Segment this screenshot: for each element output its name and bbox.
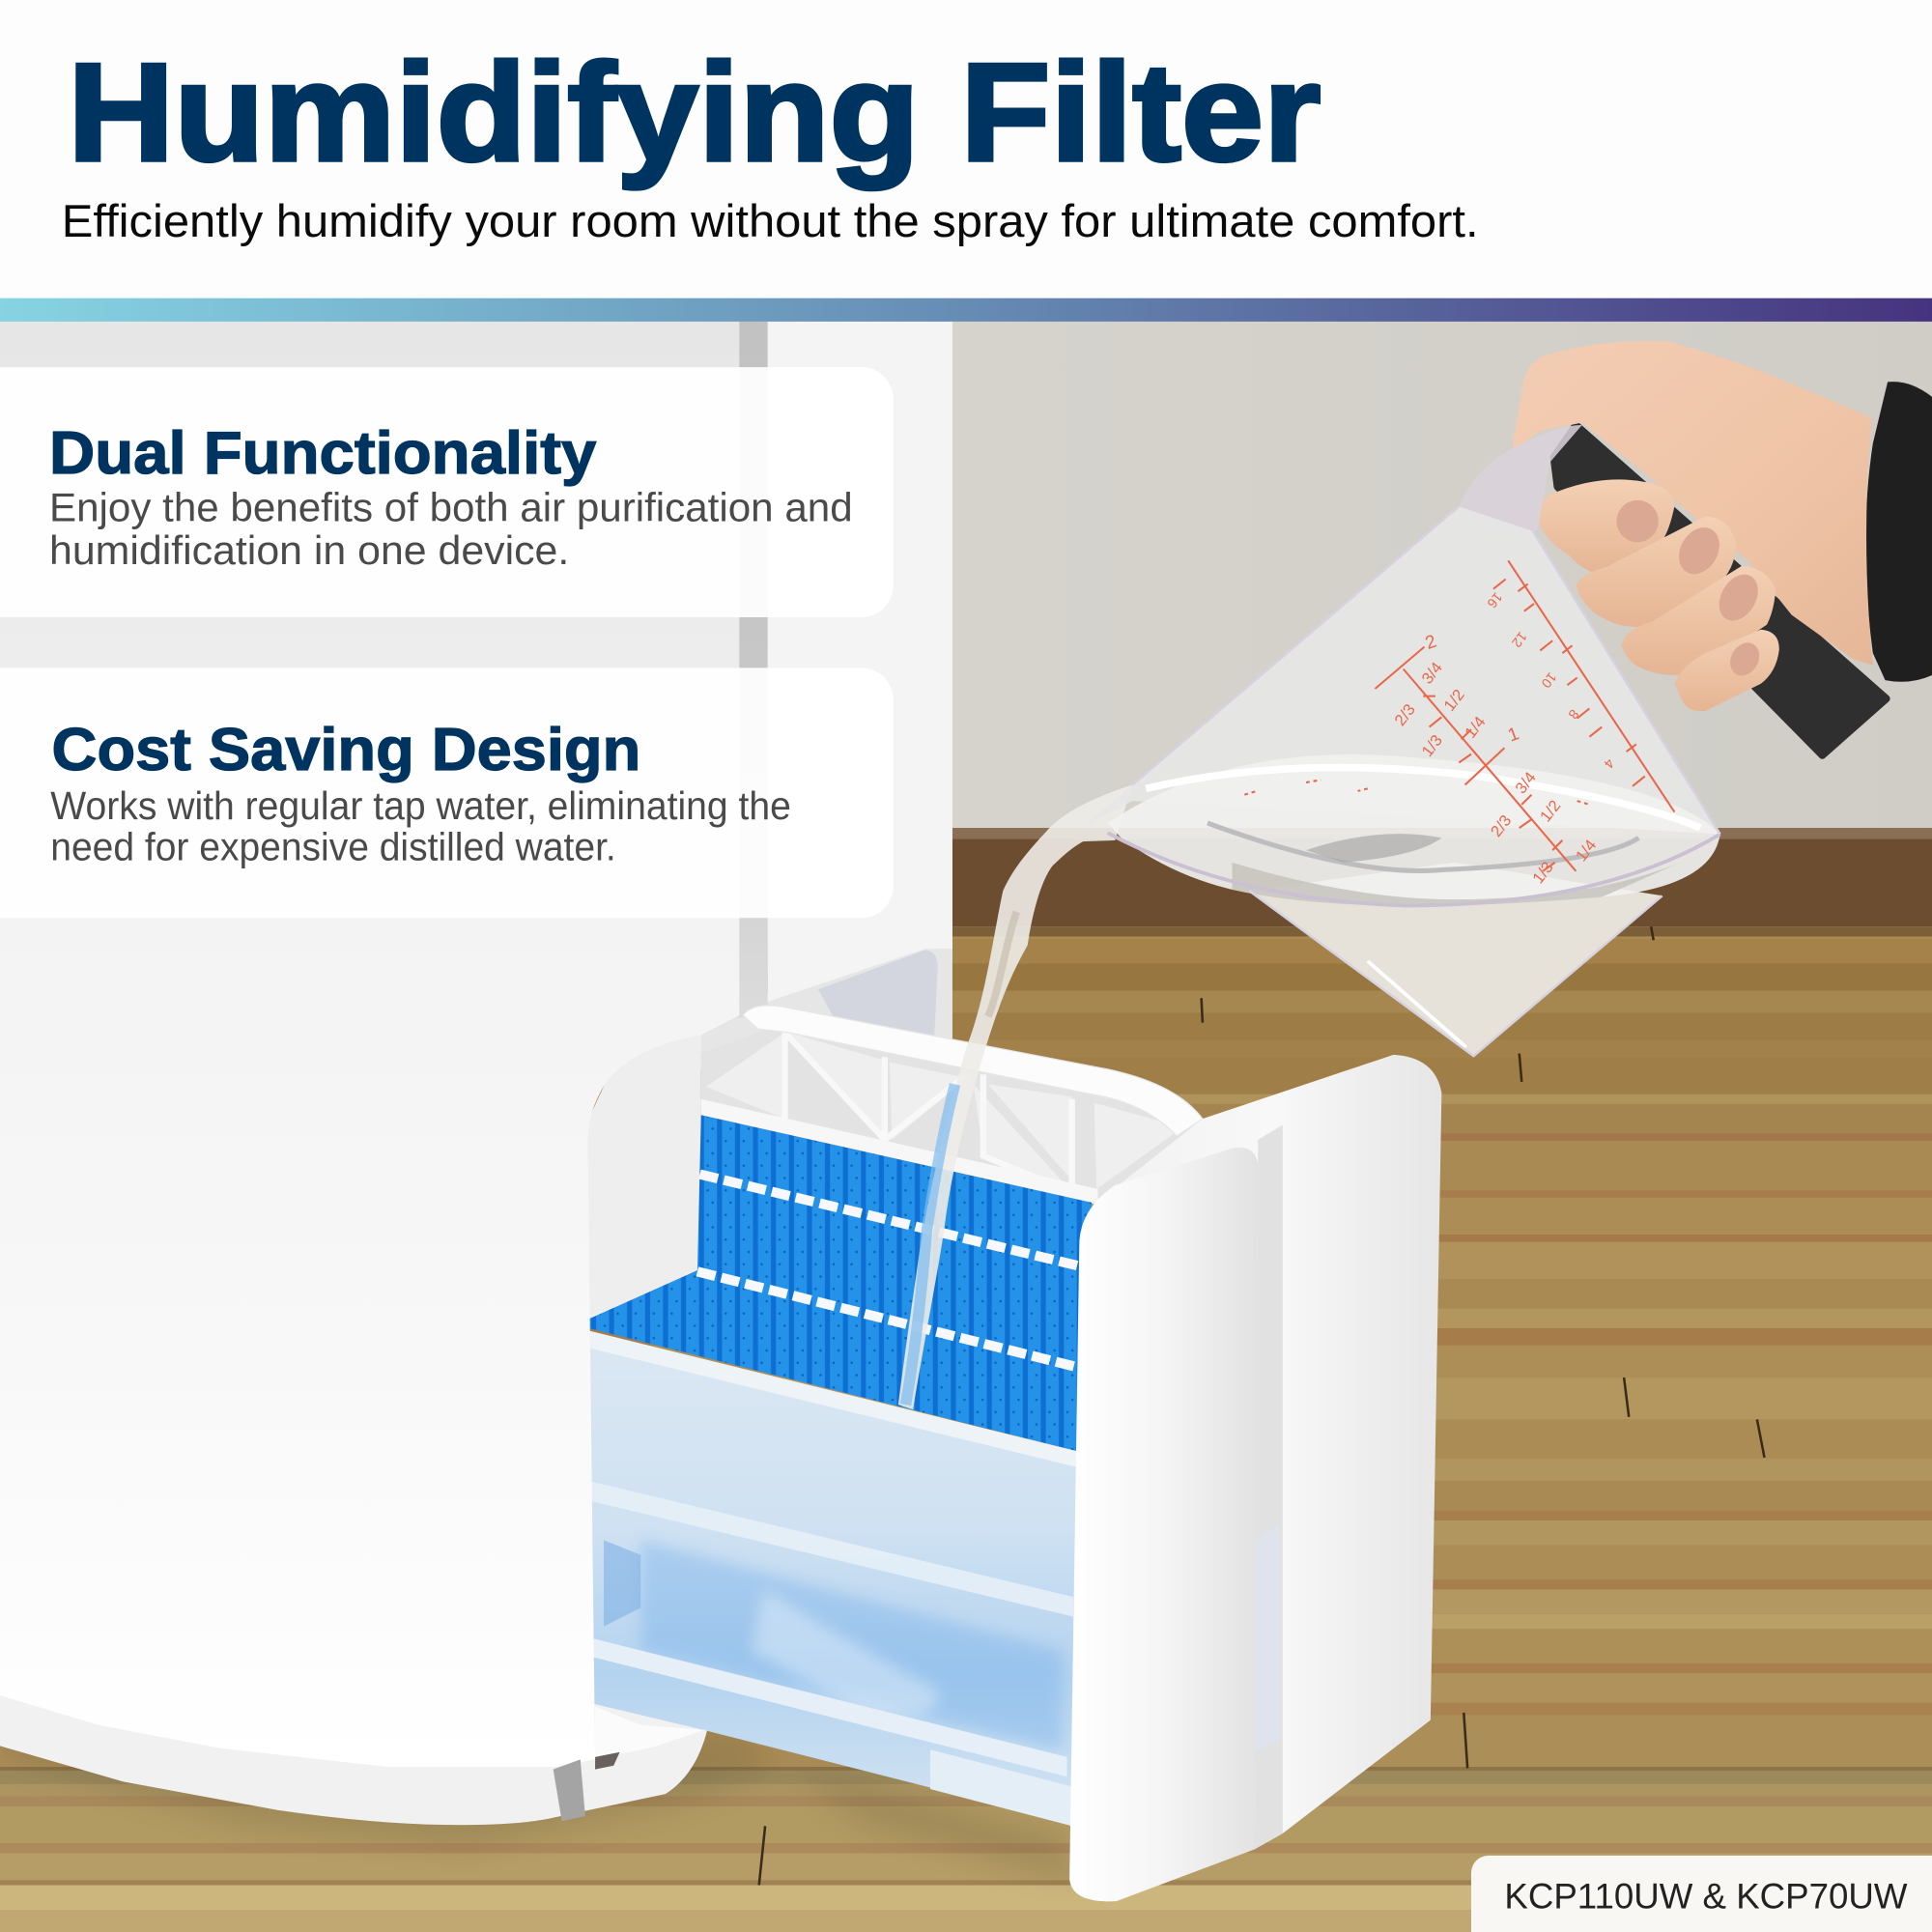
- drawer window: [818, 950, 938, 1045]
- blue filter: [579, 1115, 1092, 1452]
- palm: [1512, 341, 1873, 666]
- middle strip: [1254, 1125, 1283, 1850]
- inner side panel: [579, 1029, 701, 1343]
- foot: [554, 1759, 585, 1821]
- scale labels: 1/2: [1536, 797, 1564, 826]
- jug handle mount: [1459, 425, 1582, 538]
- header band: [0, 0, 1932, 298]
- upper panel: [766, 322, 952, 1002]
- tray base lip: [595, 1707, 705, 1770]
- wood floor: [0, 926, 1932, 1932]
- ring finger: [1622, 565, 1776, 675]
- front face: [1069, 1148, 1258, 1901]
- jug upper body: [1083, 506, 1720, 835]
- wall background: [863, 322, 1932, 829]
- panel: dual functionality: [0, 367, 894, 617]
- body text: need for expensive distilled water.: [50, 824, 616, 868]
- little finger: [1674, 630, 1779, 711]
- scale labels: [1391, 589, 1618, 887]
- index finger: [1535, 479, 1674, 576]
- drawer cavity: [690, 936, 952, 1072]
- filter frame truss: [701, 1006, 1203, 1205]
- model tag: KCP110UW & KCP70UW: [1504, 1877, 1908, 1917]
- seam strip: [737, 322, 768, 1018]
- scale labels: 1/3: [1529, 858, 1557, 887]
- body text: [49, 485, 853, 573]
- body text: humidification in one device.: [49, 527, 569, 573]
- water stream: [898, 784, 1132, 1409]
- translucent water tank: [579, 1328, 1078, 1826]
- heading: Cost Saving Design: [52, 716, 640, 783]
- scale labels: 1/4: [1572, 836, 1600, 865]
- base plinth: [0, 1688, 707, 1825]
- panel: cost saving design: [0, 668, 894, 918]
- jug handle grip: [1553, 425, 1887, 755]
- subtitle: Efficiently humidify your room without the spray for ultimate comfort.: [62, 196, 1479, 247]
- left main body: [0, 322, 739, 1767]
- side window: [1256, 1525, 1279, 1752]
- scale labels: 2: [1423, 632, 1439, 654]
- scale labels: 16: [1484, 589, 1506, 611]
- hand sleeve: [1865, 382, 1932, 682]
- body text: [50, 783, 791, 868]
- scale labels: 4: [1601, 756, 1618, 772]
- floor shadow: [0, 1725, 1084, 1886]
- measurement scale: [1244, 560, 1674, 871]
- tray interior: [579, 1006, 1203, 1826]
- model tag: [1471, 1856, 1932, 1932]
- body text: Works with regular tap water, eliminating the: [50, 783, 791, 828]
- jug lower body: [1249, 863, 1662, 1056]
- baseboard: [863, 828, 1932, 926]
- purifier back parts: [0, 322, 952, 1825]
- jug outline: [1132, 506, 1720, 1056]
- rim with water surface: [1108, 754, 1720, 906]
- heading: Dual Functionality: [49, 419, 597, 487]
- hand and fingers: [1512, 341, 1873, 711]
- scale labels: 12: [1509, 629, 1530, 651]
- drawer front panel: [1069, 1055, 1441, 1901]
- scale labels: 1/4: [1461, 713, 1490, 742]
- scale labels: 1: [1505, 724, 1521, 747]
- fingernails: [1608, 492, 1766, 681]
- scale labels: 3/4: [1418, 659, 1446, 688]
- scale labels: 2/3: [1391, 700, 1419, 729]
- scale labels: 3/4: [1512, 768, 1540, 797]
- scale labels: 8: [1565, 707, 1582, 723]
- outer side panel: [1109, 1055, 1441, 1850]
- scale labels: 1/2: [1440, 686, 1468, 715]
- scale labels: 10: [1539, 669, 1560, 692]
- submerged filter: [640, 1540, 1062, 1749]
- body text: Enjoy the benefits of both air purification and: [49, 485, 853, 530]
- scale labels: 2/3: [1487, 811, 1515, 840]
- gradient divider bar: [0, 298, 1932, 322]
- title: Humidifying Filter: [68, 35, 1321, 190]
- middle finger: [1576, 516, 1736, 627]
- scale labels: 1/3: [1418, 731, 1446, 760]
- measuring jug: [1083, 425, 1720, 1056]
